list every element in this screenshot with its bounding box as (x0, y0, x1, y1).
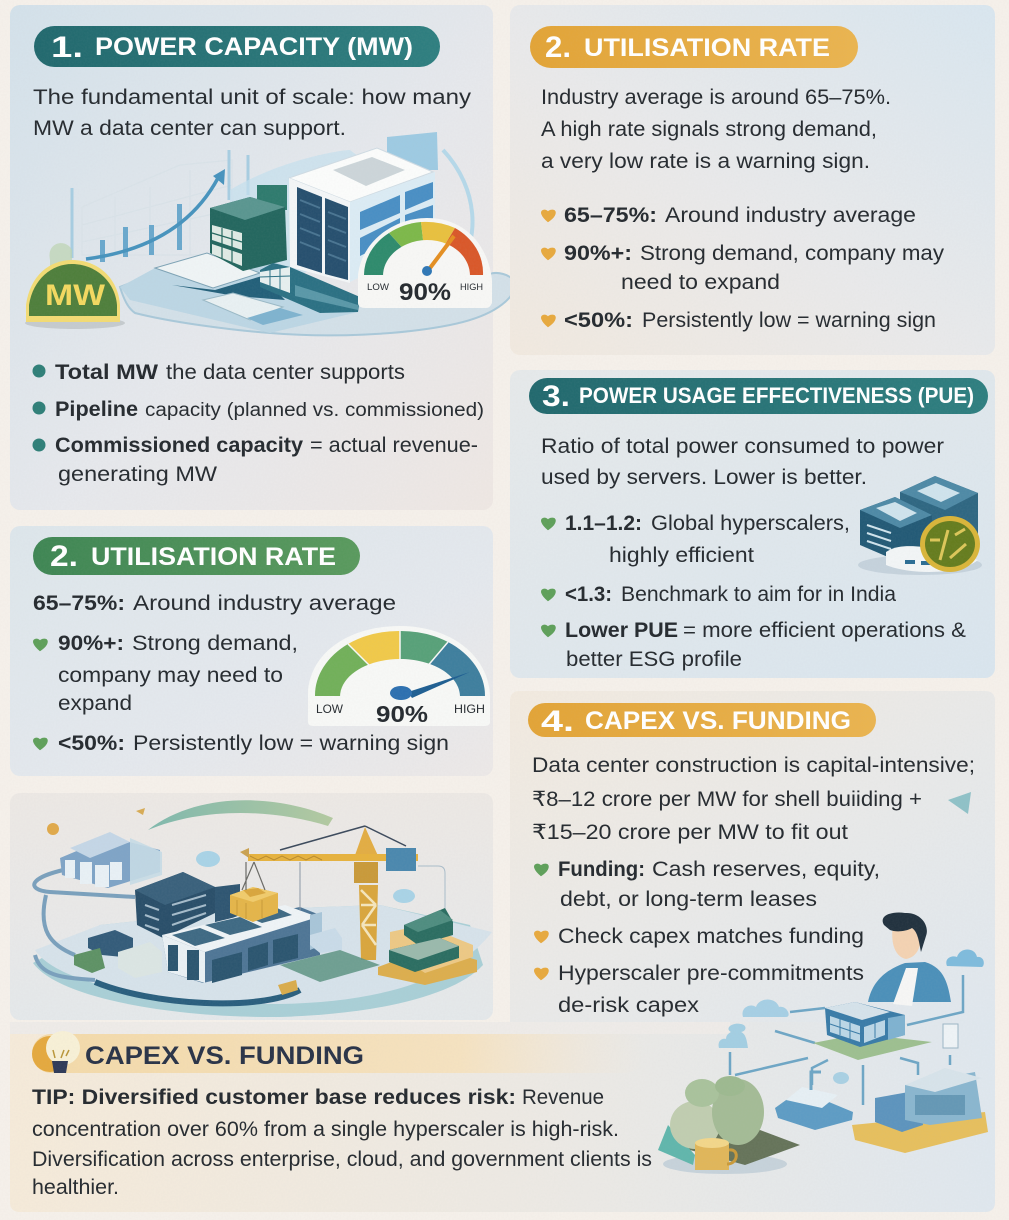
illustration: data center with growth chart (25, 132, 517, 335)
bullet: persistently low (34, 732, 449, 755)
icon: pennant (948, 792, 971, 814)
bullet list: utilisation: 65–75%: (564, 204, 657, 227)
heading: 2. utilisation rate (33, 537, 360, 575)
bullet list: utilisation: 90%+: (564, 242, 632, 265)
badge: MW: MW (45, 279, 106, 312)
heading: 2. utilisation rate: 2. (545, 31, 571, 64)
left building (60, 832, 162, 888)
bullet list: power capacity: Pipeline (55, 398, 138, 421)
intro text: ₹8–12 crore per MW for shell buiiding + (532, 788, 922, 811)
bullet list: power capacity: capacity (planned vs. commissioned) (145, 400, 484, 421)
bullet: strong demand: Strong demand, (132, 632, 298, 655)
clouds (719, 950, 984, 1048)
tip text (32, 1086, 652, 1199)
bullet: persistently low: <50%: (58, 732, 125, 755)
text: industry average: Around industry average (133, 592, 396, 615)
bullet list: capex: Check capex matches funding (558, 925, 864, 948)
heading: 3. PUE: POWER USAGE EFFECTIVENESS (PUE) (579, 383, 974, 408)
intro text: Ratio of total power consumed to power (541, 435, 944, 458)
heading: capex vs funding banner: CAPEX VS. FUNDING (85, 1042, 364, 1070)
dark building (135, 872, 240, 938)
intro text: A high rate signals strong demand, (541, 118, 877, 141)
green server block (257, 185, 287, 210)
bullet list: PUE: highly efficient (609, 544, 754, 567)
bullet list: PUE: Global hyperscalers, (651, 512, 850, 535)
heading: 1. power capacity: POWER CAPACITY (MW) (95, 33, 413, 61)
bullet list: capex: Hyperscaler pre-commitments (558, 962, 864, 985)
cloud badges (196, 851, 415, 903)
heading: 2. utilisation rate (530, 26, 858, 68)
bullet list: PUE: = more efficient operations & (683, 619, 966, 642)
bullet list: PUE: <1.3: (565, 583, 612, 606)
intro text (541, 435, 944, 489)
curved road (34, 866, 135, 980)
heading: 2. utilisation rate: UTILISATION RATE (91, 543, 336, 571)
gauge: 90 percent (358, 218, 492, 308)
connector arrows (730, 975, 963, 1105)
heading: 4. capex vs funding: 4. (541, 705, 574, 738)
intro text (541, 86, 891, 173)
bullet list: capex: debt, or long-term leases (560, 888, 817, 911)
heading: 4. capex vs funding: CAPEX VS. FUNDING (585, 707, 851, 735)
platform (120, 255, 360, 333)
text: industry average (33, 592, 396, 615)
tip text: concentration over 60% from a single hyperscaler is high-risk. (32, 1118, 619, 1141)
panel: power capacity (10, 5, 517, 510)
bullet list: power capacity: Total MW (55, 361, 158, 384)
server unit (775, 1072, 853, 1130)
intro text: a very low rate is a warning sign. (541, 150, 870, 173)
bullet: strong demand: company may need to (58, 664, 283, 687)
intro text: Data center construction is capital-intensive; (532, 754, 975, 777)
heading: 3. PUE (529, 378, 988, 414)
heading: 3. PUE: 3. (542, 380, 570, 413)
badge: MW (25, 260, 125, 329)
heading: 4. capex vs funding (528, 703, 876, 738)
tip text: TIP: Diversified customer base reduces risk: (32, 1086, 516, 1109)
tower crane (240, 826, 445, 960)
tip text: Revenue (522, 1086, 604, 1109)
gold ball and pennant (47, 808, 145, 835)
intro text (33, 86, 472, 140)
intro text: used by servers. Lower is better. (541, 466, 867, 489)
bullet: strong demand: expand (58, 692, 132, 715)
panel: utilisation rate (right) (510, 5, 995, 355)
bullet list: power capacity: generating MW (58, 463, 217, 486)
bullet list: utilisation: need to expand (621, 271, 780, 294)
bullet: strong demand: 90%+: (58, 632, 124, 655)
yellow cargo (230, 887, 278, 922)
gauge: 90 percent high (308, 626, 490, 727)
swoosh arc (148, 800, 333, 830)
tip text: Diversification across enterprise, cloud, and government clients is (32, 1148, 652, 1171)
gauge: 90 percent: HIGH (460, 282, 483, 292)
gauge: 90 percent high: LOW (316, 702, 344, 716)
bullet list: utilisation: <50%: (564, 309, 633, 332)
green crate stack (378, 908, 477, 985)
icon: light bulb (32, 1031, 80, 1073)
gauge: 90 percent: 90% (399, 279, 451, 306)
heading: 2. utilisation rate: 2. (50, 540, 78, 573)
person (868, 912, 951, 1006)
bullet list: power capacity: Commissioned capacity (55, 434, 303, 457)
bullet list: power capacity (32, 361, 484, 486)
heading: 2. utilisation rate: UTILISATION RATE (584, 34, 830, 62)
chart grid (82, 160, 232, 255)
intro text: MW a data center can support. (33, 117, 346, 140)
bullet list: PUE: Lower PUE (565, 619, 678, 642)
tower (289, 148, 433, 202)
heading: 1. power capacity (34, 26, 440, 67)
bullet list: capex: de-risk capex (558, 994, 700, 1017)
bullet list: PUE (542, 512, 966, 671)
heading: capex vs funding banner (32, 1034, 644, 1073)
bullet list: capex: Funding: (558, 858, 645, 881)
money bags (658, 1076, 800, 1174)
panel: construction illustration (10, 793, 493, 1020)
bullet list: capex: Cash reserves, equity, (652, 858, 880, 881)
bullet list: PUE: Benchmark to aim for in India (621, 583, 896, 606)
intro text: ₹15–20 crore per MW to fit out (532, 821, 848, 844)
bullet list: capex (535, 858, 880, 1017)
pallet with buildings (852, 1024, 988, 1153)
bullet list: power capacity: = actual revenue- (310, 434, 478, 457)
heading: 1. power capacity: 1. (51, 31, 83, 64)
bullet: persistently low: Persistently low = warning sign (133, 732, 449, 755)
ground shadow (120, 273, 517, 335)
panel: power usage effectiveness (510, 370, 995, 678)
intro text: Industry average is around 65–75%. (541, 86, 891, 109)
text: industry average: 65–75%: (33, 592, 125, 615)
bullet list: PUE: better ESG profile (566, 648, 742, 671)
bullet list: power capacity: the data center supports (166, 361, 405, 384)
center data hall (813, 1002, 932, 1060)
panel: utilisation rate (left) (10, 526, 493, 776)
icon: server stacks with coin (858, 476, 982, 575)
illustration: funding network (658, 912, 988, 1174)
bullet: strong demand (34, 632, 298, 715)
intro text: The fundamental unit of scale: how many (33, 86, 472, 109)
panel: capex vs funding (510, 691, 995, 1030)
small units and plans (74, 928, 380, 995)
tip text: healthier. (32, 1176, 119, 1199)
bullet list: utilisation: Strong demand, company may (640, 242, 945, 265)
bullet list: PUE: 1.1–1.2: (565, 512, 642, 535)
gauge: 90 percent high: HIGH (454, 702, 485, 716)
gauge: 90 percent high: 90% (376, 701, 428, 727)
gauge: 90 percent: LOW (367, 282, 390, 292)
bullet list: utilisation (542, 204, 945, 332)
bullet list: utilisation: Around industry average (665, 204, 916, 227)
bullet list: utilisation: Persistently low = warning sign (642, 309, 936, 332)
panel: tip (10, 1022, 995, 1212)
ground (33, 905, 492, 1017)
white building (162, 905, 322, 983)
intro text (532, 754, 975, 844)
low block (260, 263, 360, 313)
